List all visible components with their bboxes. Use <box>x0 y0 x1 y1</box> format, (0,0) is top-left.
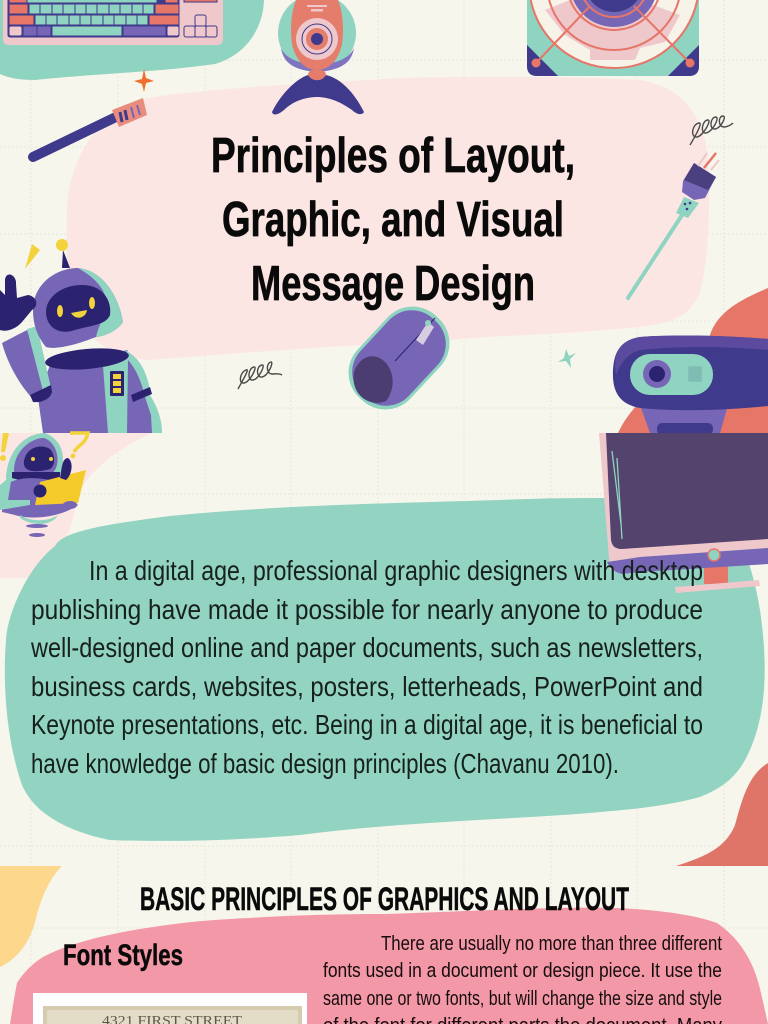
title <box>211 129 575 311</box>
panel: section 3 background <box>0 866 768 1024</box>
panel: title background blob <box>67 77 709 360</box>
title: Graphic, and Visual <box>222 193 564 247</box>
icon: teal star <box>558 349 576 368</box>
font styles paragraph <box>323 932 723 1024</box>
title: Message Design <box>251 257 535 311</box>
icon: webcam top <box>272 0 364 114</box>
icon: keyboard <box>3 0 223 45</box>
panel: pink blob behind small robot <box>0 433 152 578</box>
panel: teal blob top left <box>0 0 264 80</box>
icon: webcam right <box>613 336 768 435</box>
icon: network cable <box>33 98 147 157</box>
icon: plug and cable <box>628 153 719 298</box>
panel: coral blob bottom right <box>676 763 768 866</box>
panel: section 2 background <box>0 433 768 866</box>
icon: orange star <box>134 69 154 92</box>
icon: squiggle lower <box>238 362 282 389</box>
panel: yellow corner blob <box>0 866 62 967</box>
intro paragraph <box>30 555 703 779</box>
intro paragraph: have knowledge of basic design principles (Chavanu 2010). <box>31 748 619 779</box>
icon: squiggle top right <box>690 116 733 145</box>
icon: desktop monitor <box>599 433 768 593</box>
title: Principles of Layout, <box>211 129 575 183</box>
panel: teal intro blob <box>5 498 765 841</box>
icon: desk fan <box>527 0 699 76</box>
icon: robot waving <box>0 239 162 433</box>
heading: font styles: Font Styles <box>63 939 183 972</box>
picture: letterhead sample <box>33 993 307 1024</box>
panel: coral blob right <box>618 288 768 433</box>
icon: wireless mouse <box>334 292 464 424</box>
icon: small robot reading <box>0 433 88 537</box>
panel: pink principles blob <box>10 908 768 1024</box>
